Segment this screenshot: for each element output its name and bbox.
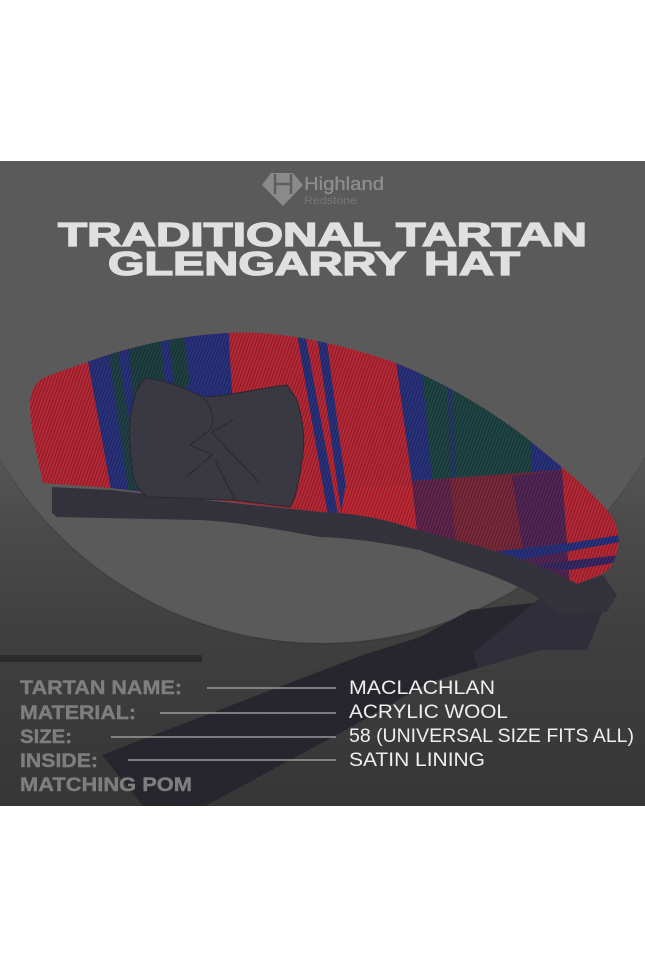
centre vertical stripes bbox=[296, 328, 338, 515]
hat: tartan crown bbox=[30, 332, 619, 584]
right blue and green block bbox=[396, 364, 562, 482]
twill texture bbox=[30, 332, 618, 584]
title: HAT bbox=[424, 245, 520, 282]
icon: diamond logo bbox=[262, 173, 303, 206]
logo subtitle: Redstone bbox=[304, 195, 357, 207]
purple crossing bbox=[412, 470, 560, 560]
specification labels: MATERIAL: bbox=[20, 703, 136, 724]
specification values bbox=[349, 678, 634, 771]
logo: Highland Redstone bbox=[262, 173, 384, 207]
specification labels: SIZE: bbox=[20, 727, 72, 748]
lower bright red band bbox=[341, 486, 416, 530]
title bbox=[58, 216, 587, 282]
title: GLENGARRY bbox=[108, 245, 406, 282]
specification labels: TARTAN NAME: bbox=[20, 678, 182, 699]
red base bbox=[30, 332, 619, 584]
dark accent bar bbox=[0, 655, 202, 662]
horizontal stripes at right bbox=[490, 535, 620, 560]
title: TARTAN bbox=[396, 216, 587, 253]
specification values: 58 (UNIVERSAL SIZE FITS ALL) bbox=[349, 726, 634, 747]
bow bbox=[130, 378, 304, 507]
specification labels: INSIDE: bbox=[20, 751, 98, 772]
ribbon tails bbox=[102, 598, 605, 806]
hat band bbox=[52, 487, 617, 615]
specification values: SATIN LINING bbox=[349, 750, 485, 771]
specification values: ACRYLIC WOOL bbox=[349, 702, 508, 723]
title: TRADITIONAL bbox=[58, 216, 381, 253]
specification labels bbox=[20, 678, 192, 796]
background panel bbox=[0, 161, 645, 806]
specification labels: MATCHING POM bbox=[20, 775, 192, 796]
large grey circle behind hat bbox=[16, 481, 628, 643]
left blue and green block bbox=[88, 332, 232, 492]
specification values: MACLACHLAN bbox=[349, 678, 495, 699]
leader lines bbox=[111, 688, 336, 760]
logo wordmark: Highland bbox=[304, 174, 384, 194]
